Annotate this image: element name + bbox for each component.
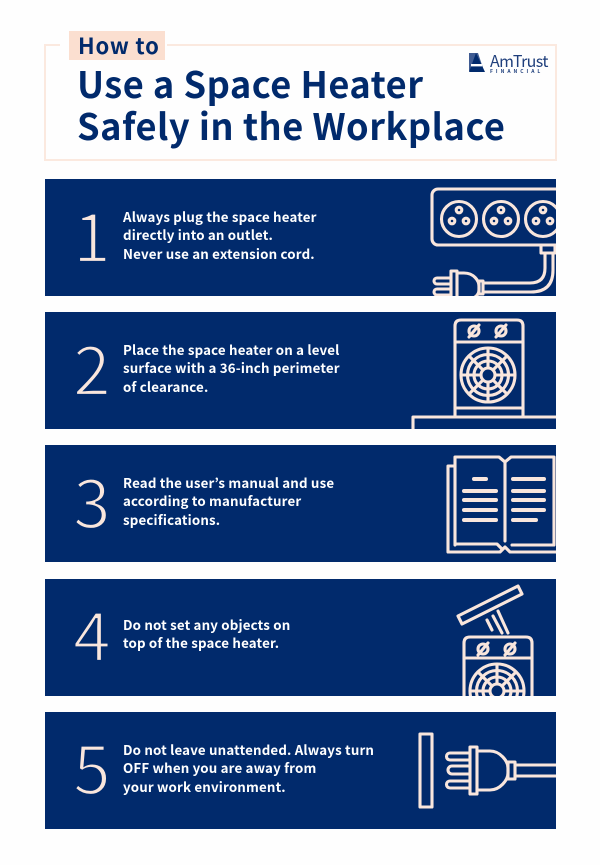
icon: open manual — [448, 457, 560, 552]
text: step 2: surface with a 36-inch perimeter — [123, 358, 340, 377]
number 4: 4 — [73, 582, 111, 681]
text: step 4: Do not set any objects on — [123, 615, 290, 634]
panel: step 4 — [45, 579, 556, 696]
text: step 5: your work environment. — [123, 777, 286, 796]
panel: step 3 — [45, 445, 560, 562]
text: step 3: Read the user’s manual and use — [123, 473, 334, 492]
text: step 2: Place the space heater on a level — [123, 340, 340, 359]
icon: power strip and plug — [430, 188, 556, 296]
logo: AmTrust Financial — [469, 48, 548, 75]
icon: heater on shelf — [413, 320, 560, 430]
logo: AmTrust Financial: AmTrust — [490, 48, 548, 72]
text: step 5: Do not leave unattended. Always turn — [123, 740, 374, 759]
text: step 3: according to manufacturer — [123, 491, 301, 510]
text: step 4: top of the space heater. — [123, 633, 279, 652]
text: step 1: directly into an outlet. — [123, 225, 273, 244]
panel: step 1 — [45, 179, 572, 300]
number 3: 3 — [73, 449, 111, 548]
number 5: 5 — [73, 715, 111, 814]
header panel — [45, 29, 556, 160]
how to tag: How to — [78, 29, 160, 61]
text: step 3: specifications. — [123, 510, 220, 529]
icon: unplugged plug and wall — [420, 734, 560, 807]
title: Use a Space Heater — [77, 57, 423, 109]
text: step 5: OFF when you are away from — [123, 758, 316, 777]
panel: step 5 — [45, 712, 560, 829]
text: step 1: Never use an extension cord. — [123, 244, 315, 263]
panel: step 2 — [45, 312, 560, 430]
title: Safely in the Workplace — [77, 99, 505, 151]
number 1: 1 — [73, 183, 111, 282]
logo: AmTrust Financial: FINANCIAL — [490, 68, 543, 75]
icon: object above heater — [456, 584, 534, 696]
text: step 1: Always plug the space heater — [122, 207, 317, 226]
number 2: 2 — [73, 316, 111, 415]
text: step 2: of clearance. — [123, 377, 208, 396]
